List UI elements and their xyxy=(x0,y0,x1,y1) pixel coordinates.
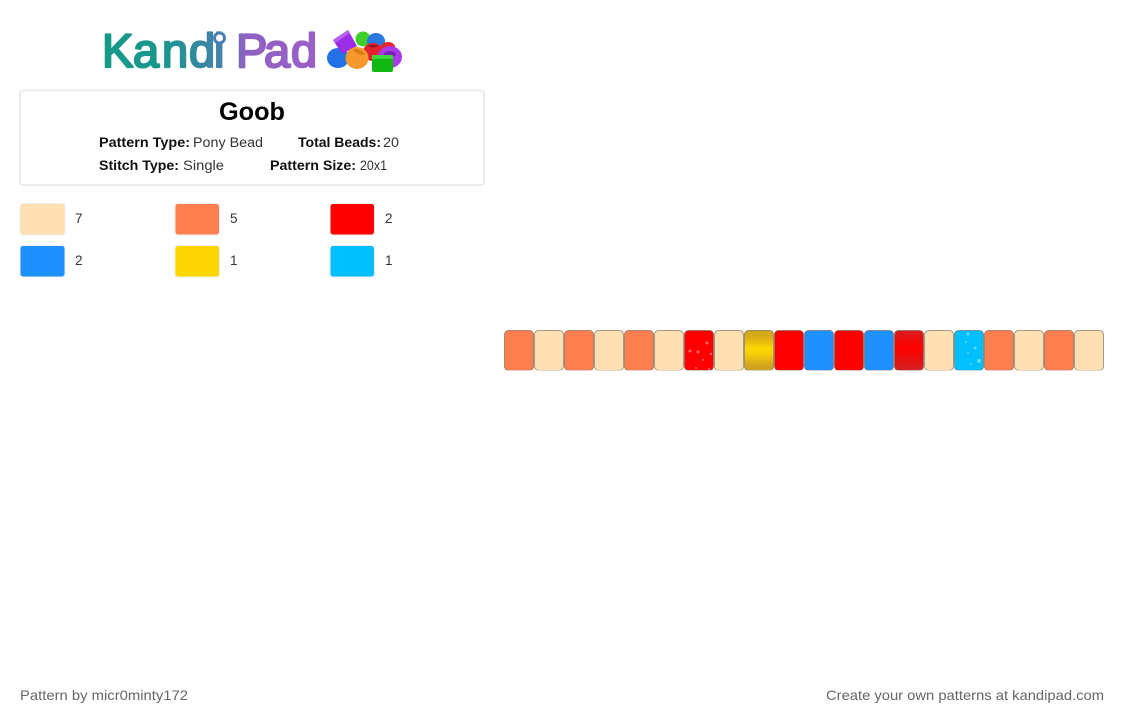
legend item: red 2: 2 xyxy=(385,211,393,226)
text: pattern size: 20x1 xyxy=(360,158,387,173)
text: total beads: 20 xyxy=(383,135,399,150)
legend: bead colour counts xyxy=(20,204,393,277)
logo wordmark: Kandi xyxy=(102,24,224,77)
text: pattern size xyxy=(270,158,387,173)
logo wordmark xyxy=(102,24,317,77)
legend item: coral 5 xyxy=(175,204,238,235)
legend item: coral 5: 5 xyxy=(230,211,238,226)
legend item: bisque 7: 7 xyxy=(75,211,83,226)
bead strip: 20x1 pattern xyxy=(504,330,1104,372)
icon: pile of pony beads xyxy=(327,30,402,72)
logo: Kandi Pad xyxy=(102,24,402,77)
bead: red metallic xyxy=(894,330,924,370)
legend item: sky blue 1 xyxy=(330,246,393,277)
logo wordmark: Pad xyxy=(236,24,317,77)
bead: gold metallic xyxy=(744,330,774,370)
text: pattern size: Pattern Size: xyxy=(270,158,356,173)
legend item: gold 1 xyxy=(175,246,238,277)
legend item: blue 2 xyxy=(20,246,83,277)
text: pattern type: Pony Bead xyxy=(193,135,263,150)
legend item: sky blue 1: 1 xyxy=(385,253,393,268)
text: stitch type xyxy=(99,158,224,173)
bead: red speckled xyxy=(684,330,714,370)
bead: sky blue speckled xyxy=(954,330,984,370)
footer: pattern credit: Pattern by micr0minty172 xyxy=(20,687,188,703)
heading: pattern title: Goob xyxy=(219,98,285,126)
text: total beads: Total Beads: xyxy=(298,135,381,150)
legend item: bisque 7 xyxy=(20,204,83,235)
text: stitch type: Single xyxy=(183,158,224,173)
text: pattern type xyxy=(99,135,263,150)
legend item: gold 1: 1 xyxy=(230,253,238,268)
legend item: red 2 xyxy=(330,204,393,235)
legend item: blue 2: 2 xyxy=(75,253,83,268)
panel: pattern info card xyxy=(20,90,484,185)
text: pattern type: Pattern Type: xyxy=(99,135,190,150)
footer: site credit: Create your own patterns at kandipad.com xyxy=(826,687,1104,703)
text: stitch type: Stitch Type: xyxy=(99,158,179,173)
